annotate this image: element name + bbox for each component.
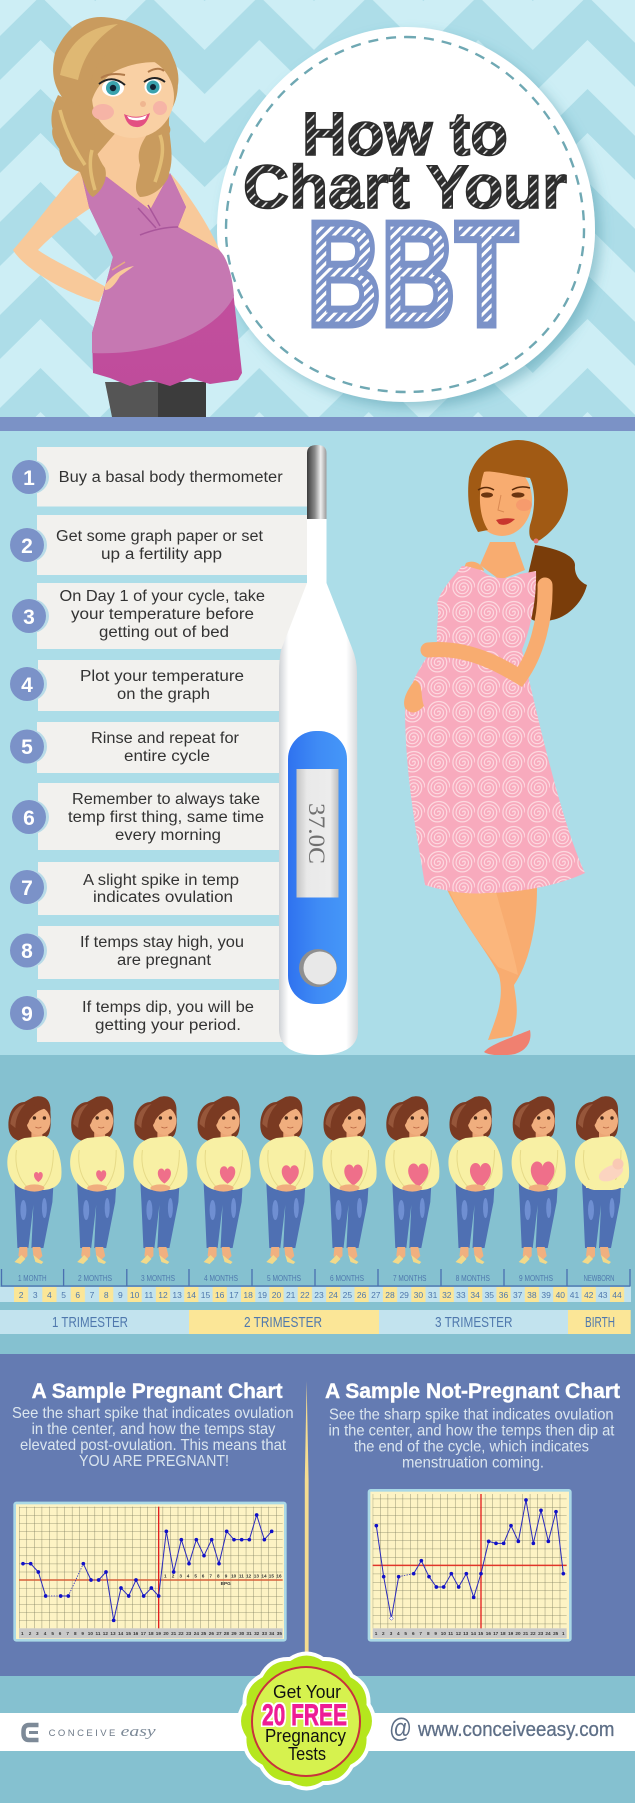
panel: steps section [0, 431, 635, 1055]
chart: not-pregnant BBT [368, 1489, 572, 1642]
chart: pregnant BBT: 34 [269, 1631, 275, 1636]
chart: pregnant BBT: 2 [172, 1574, 175, 1579]
chart: pregnant BBT: 11 [96, 1631, 101, 1636]
chart: pregnant BBT: 9 [81, 1631, 84, 1636]
week number strip: 32 [442, 1290, 452, 1300]
title: BBT: BBT [307, 192, 518, 357]
column divider [305, 1381, 309, 1660]
panel: sample charts section [0, 1354, 635, 1676]
trimester bars: 2 TRIMESTER [244, 1314, 322, 1331]
chart: not-pregnant BBT: 5 [404, 1631, 407, 1636]
step 8: If temps stay high, you [80, 934, 244, 951]
step 6: temp first thing, same time [68, 809, 264, 826]
week number strip: 36 [499, 1290, 508, 1300]
week number strip: 28 [385, 1290, 395, 1300]
illustration: pregnant woman in pink dress [404, 440, 587, 1055]
divider bar [0, 417, 635, 431]
chart: pregnant BBT: 35 [277, 1631, 282, 1636]
step 2: 2 [21, 535, 33, 558]
title: How to Chart Your: Chart Your [243, 153, 567, 221]
chart: pregnant BBT: 4 [44, 1631, 47, 1636]
step 4: Plot your temperature [80, 668, 244, 685]
trimester bars [0, 1310, 631, 1334]
chart: pregnant BBT: 30 [239, 1631, 245, 1636]
step 8 [10, 926, 288, 979]
week number strip: 7 [90, 1290, 95, 1300]
step 5: 5 [21, 736, 33, 759]
logo: Conceive Easy: easy [121, 1724, 156, 1740]
chart: not-pregnant BBT: 17 [493, 1631, 499, 1636]
chart: not-pregnant BBT: 11 [448, 1631, 454, 1636]
chart: pregnant BBT: 20 [163, 1631, 169, 1636]
chart: not-pregnant BBT: 16 [486, 1631, 491, 1636]
figure: month 7 [385, 1096, 439, 1264]
step 2: up a fertility app [101, 546, 222, 563]
step 5 [10, 722, 288, 773]
chart: pregnant BBT: BPG [221, 1581, 231, 1586]
week number strip: 34 [470, 1290, 480, 1300]
step 4 [10, 660, 288, 711]
step 6: 6 [23, 807, 35, 830]
month brackets [2, 1269, 630, 1286]
chart: not-pregnant BBT: 10 [441, 1631, 446, 1636]
heading and text: not-pregnant chart: See the sharp spike that indicates ovulation [329, 1406, 614, 1424]
figure: newborn [575, 1096, 629, 1264]
week number strip: 2 [19, 1290, 24, 1300]
chart: not-pregnant BBT: 1 [562, 1631, 565, 1636]
chart: pregnant BBT: 14 [261, 1574, 267, 1579]
chart: not-pregnant BBT: 22 [530, 1631, 536, 1636]
week number strip: 15 [201, 1290, 210, 1300]
step 4: 4 [21, 674, 33, 697]
chart: pregnant BBT: 12 [103, 1631, 108, 1636]
week number strip: 25 [343, 1290, 352, 1300]
step 1: 1 [23, 467, 35, 490]
step 6: every morning [115, 827, 221, 844]
heading and text: pregnant chart: elevated post-ovulation. This means that [20, 1437, 287, 1454]
chart: pregnant BBT: 13 [254, 1574, 259, 1579]
week number strip: 23 [314, 1290, 324, 1300]
month brackets: 6 MONTHS [330, 1274, 364, 1283]
trimester bars: 3 TRIMESTER [435, 1314, 513, 1331]
heading and text: not-pregnant chart: the end of the cycle, which indicates [354, 1438, 589, 1456]
month brackets: 3 MONTHS [141, 1274, 175, 1283]
heading and text: pregnant chart: See the shart spike that indicates ovulation [12, 1405, 294, 1422]
heading and text: pregnant chart: A Sample Pregnant Chart [32, 1380, 283, 1403]
step 7 [10, 862, 288, 915]
chart: pregnant BBT: 18 [148, 1631, 154, 1636]
figure: month 5 [259, 1096, 313, 1264]
figure: month 1 [7, 1096, 62, 1264]
week number strip: 14 [187, 1290, 196, 1300]
week number strip: 37 [513, 1290, 523, 1300]
chart: not-pregnant BBT: 4 [397, 1631, 400, 1636]
chart: pregnant BBT: 10 [231, 1574, 237, 1579]
week number strip: 8 [104, 1290, 109, 1300]
week number strip: 24 [328, 1290, 338, 1300]
thermometer [279, 445, 358, 1055]
chart: pregnant BBT: 3 [36, 1631, 39, 1636]
chart: pregnant BBT: 27 [216, 1631, 222, 1636]
step 1 [12, 447, 310, 506]
chart: pregnant BBT: 32 [254, 1631, 260, 1636]
chart: pregnant BBT: 11 [239, 1574, 244, 1579]
title: How to Chart Your: How to [302, 100, 508, 168]
title: How to Chart Your [243, 100, 567, 221]
chart: pregnant BBT: 25 [201, 1631, 207, 1636]
step 8: 8 [21, 940, 33, 963]
step 5: Rinse and repeat for [91, 730, 239, 747]
figure: month 4 [197, 1096, 251, 1264]
step 3: your temperature before [71, 606, 254, 623]
chart: pregnant BBT: 12 [246, 1574, 252, 1579]
heading and text: not-pregnant chart [325, 1380, 620, 1472]
chart: not-pregnant BBT: 23 [538, 1631, 544, 1636]
chart: not-pregnant BBT: 20 [515, 1631, 521, 1636]
step 7: A slight spike in temp [83, 872, 239, 889]
step 2 [10, 515, 310, 575]
figure: month 2 [70, 1096, 124, 1264]
week number strip: 22 [300, 1290, 310, 1300]
month brackets: 9 MONTHS [519, 1274, 553, 1283]
badge: get your 20 free pregnancy tests: Get Your [273, 1682, 341, 1702]
chart: pregnant BBT: 17 [141, 1631, 146, 1636]
week number strip: 33 [456, 1290, 466, 1300]
week number strip: 3 [33, 1290, 38, 1300]
chart: pregnant BBT: 28 [224, 1631, 229, 1636]
week number strip: 4 [47, 1290, 52, 1300]
step 6 [12, 783, 288, 850]
step 9: If temps dip, you will be [82, 999, 254, 1016]
chart: pregnant BBT: 21 [171, 1631, 177, 1636]
week number strip: 16 [215, 1290, 225, 1300]
chart: pregnant BBT: 9 [225, 1574, 228, 1579]
week number strip: 31 [428, 1290, 438, 1300]
week number strip: 9 [118, 1290, 123, 1300]
chart: not-pregnant BBT: 9 [434, 1631, 437, 1636]
chart: not-pregnant BBT: 7 [419, 1631, 422, 1636]
chart: pregnant BBT: 29 [231, 1631, 237, 1636]
week number strip: 43 [598, 1290, 608, 1300]
step 3: getting out of bed [99, 624, 229, 641]
month brackets: 7 MONTHS [393, 1274, 426, 1283]
chart: pregnant BBT: 23 [186, 1631, 192, 1636]
steps list [10, 447, 310, 1042]
badge: get your 20 free pregnancy tests: Pregnancy [265, 1726, 346, 1746]
week number strip: 27 [371, 1290, 381, 1300]
logo: Conceive Easy: CONCEIVE [49, 1728, 115, 1739]
month brackets: NEWBORN [584, 1274, 615, 1283]
week number strip: 38 [527, 1290, 537, 1300]
chart: pregnant BBT: 6 [59, 1631, 62, 1636]
chart: not-pregnant BBT: 1 [375, 1631, 378, 1636]
website address: www.conceiveeasy.com [417, 1719, 614, 1741]
chart: pregnant BBT: 4 [187, 1574, 190, 1579]
logo: Conceive Easy [24, 1724, 156, 1740]
trimester bars: 1 TRIMESTER [52, 1314, 128, 1331]
chart: pregnant BBT: 15 [269, 1574, 274, 1579]
chart: pregnant BBT: 7 [209, 1574, 212, 1579]
month brackets: 4 MONTHS [204, 1274, 238, 1283]
chart: pregnant BBT: 14 [118, 1631, 124, 1636]
figure: month 3 [133, 1096, 188, 1264]
trimester bars: BIRTH [585, 1314, 615, 1331]
chart: pregnant BBT: 24 [194, 1631, 199, 1636]
step 7: indicates ovulation [93, 889, 233, 906]
chart: not-pregnant BBT: 19 [508, 1631, 514, 1636]
step 3: 3 [23, 606, 35, 629]
chart: not-pregnant BBT: 2 [382, 1631, 385, 1636]
chart: pregnant BBT: 3 [179, 1574, 182, 1579]
week number strip: 20 [272, 1290, 281, 1300]
step 9: getting your period. [95, 1017, 241, 1034]
week number strip: 11 [144, 1290, 153, 1300]
heading and text: pregnant chart: in the center, and how the temps stay [32, 1421, 275, 1438]
week number strip: 13 [172, 1290, 182, 1300]
week number strip: 42 [584, 1290, 594, 1300]
week number strip: 41 [570, 1290, 579, 1300]
figure: month 6 [322, 1096, 377, 1264]
chart: pregnant BBT: 8 [217, 1574, 220, 1579]
chart: not-pregnant BBT: 21 [523, 1631, 529, 1636]
step 5: entire cycle [124, 748, 210, 765]
heading and text: not-pregnant chart: in the center, and how the temps then dip at [328, 1422, 615, 1440]
week number strip: 12 [158, 1290, 168, 1300]
chart: pregnant BBT: 26 [209, 1631, 214, 1636]
week number strip: 6 [75, 1290, 80, 1300]
chart: pregnant BBT: 22 [178, 1631, 184, 1636]
panel: pregnancy timeline section [0, 1055, 635, 1354]
chart: not-pregnant BBT: 15 [478, 1631, 484, 1636]
chart: not-pregnant BBT: 8 [427, 1631, 430, 1636]
week number strip: 35 [485, 1290, 494, 1300]
week number strip [0, 1287, 631, 1302]
step 6: Remember to always take [72, 791, 260, 808]
website address: @ [389, 1713, 412, 1743]
step 3: On Day 1 of your cycle, take [60, 588, 265, 605]
week number strip: 19 [258, 1290, 267, 1300]
chart: pregnant BBT: 33 [262, 1631, 267, 1636]
chart: pregnant BBT: 19 [156, 1631, 161, 1636]
chart: pregnant BBT: 1 [21, 1631, 24, 1636]
panel: chevron header background [0, 0, 635, 417]
chart: pregnant BBT: 8 [74, 1631, 77, 1636]
week number strip: 17 [229, 1290, 239, 1300]
week number strip: 40 [556, 1290, 565, 1300]
figure: month 8 [448, 1096, 503, 1264]
step 9: 9 [21, 1003, 33, 1026]
chart: pregnant BBT: 5 [194, 1574, 197, 1579]
step 1: Buy a basal body thermometer [59, 469, 283, 486]
month brackets: 8 MONTHS [456, 1274, 490, 1283]
chart: pregnant BBT: 2 [29, 1631, 32, 1636]
month brackets: 2 MONTHS [78, 1274, 112, 1283]
panel: footer band [0, 1676, 635, 1803]
week number strip: 39 [541, 1290, 551, 1300]
step 9 [10, 990, 288, 1042]
week number strip: 44 [612, 1290, 622, 1300]
step 7: 7 [21, 877, 33, 900]
chart: pregnant BBT: 6 [202, 1574, 205, 1579]
week number strip: 26 [357, 1290, 367, 1300]
badge: get your 20 free pregnancy tests [239, 1654, 374, 1788]
chart: pregnant BBT: 31 [246, 1631, 252, 1636]
illustration: pregnant woman in purple dress [13, 17, 242, 417]
badge: get your 20 free pregnancy tests: 20 FREE [262, 1699, 347, 1732]
heading and text: pregnant chart [12, 1380, 294, 1470]
badge: get your 20 free pregnancy tests: Tests [288, 1744, 326, 1764]
title egg badge [217, 27, 595, 402]
chart: pregnant BBT: 10 [88, 1631, 93, 1636]
week number strip: 21 [286, 1290, 296, 1300]
chart: pregnant BBT: 7 [66, 1631, 69, 1636]
week number strip: 29 [399, 1290, 409, 1300]
step 3 [12, 583, 310, 649]
chart: pregnant BBT: 5 [51, 1631, 54, 1636]
heading and text: pregnant chart: YOU ARE PREGNANT! [79, 1453, 229, 1470]
chart: pregnant BBT: 16 [133, 1631, 139, 1636]
chart: not-pregnant BBT: 12 [456, 1631, 461, 1636]
heading and text: not-pregnant chart: A Sample Not-Pregnant Chart [325, 1380, 620, 1403]
month brackets: 5 MONTHS [267, 1274, 301, 1283]
thermometer: 37.0C [304, 803, 329, 864]
chart: pregnant BBT: 15 [126, 1631, 131, 1636]
chart: not-pregnant BBT: 24 [545, 1631, 551, 1636]
pregnancy progression figures [7, 1096, 629, 1264]
chart: not-pregnant BBT: 18 [500, 1631, 506, 1636]
chart: not-pregnant BBT: 13 [463, 1631, 469, 1636]
week number strip: 30 [414, 1290, 423, 1300]
step 4: on the graph [117, 686, 210, 703]
step 8: are pregnant [117, 952, 212, 969]
chart: not-pregnant BBT: 25 [553, 1631, 559, 1636]
chart: not-pregnant BBT: 6 [412, 1631, 415, 1636]
chart: not-pregnant BBT: 14 [471, 1631, 476, 1636]
week number strip: 5 [61, 1290, 66, 1300]
website address [389, 1713, 614, 1743]
chart: pregnant BBT: 1 [164, 1574, 167, 1579]
week number strip: 18 [243, 1290, 253, 1300]
chart: pregnant BBT: 13 [110, 1631, 116, 1636]
heading and text: not-pregnant chart: menstruation coming. [402, 1454, 544, 1472]
chart: pregnant BBT: 16 [276, 1574, 282, 1579]
figure: month 9 [512, 1096, 566, 1264]
month brackets: 1 MONTH [18, 1274, 47, 1283]
step 2: Get some graph paper or set [56, 528, 264, 545]
week number strip: 10 [130, 1290, 140, 1300]
chart: pregnant BBT [13, 1502, 287, 1642]
chart: not-pregnant BBT: 3 [390, 1631, 393, 1636]
